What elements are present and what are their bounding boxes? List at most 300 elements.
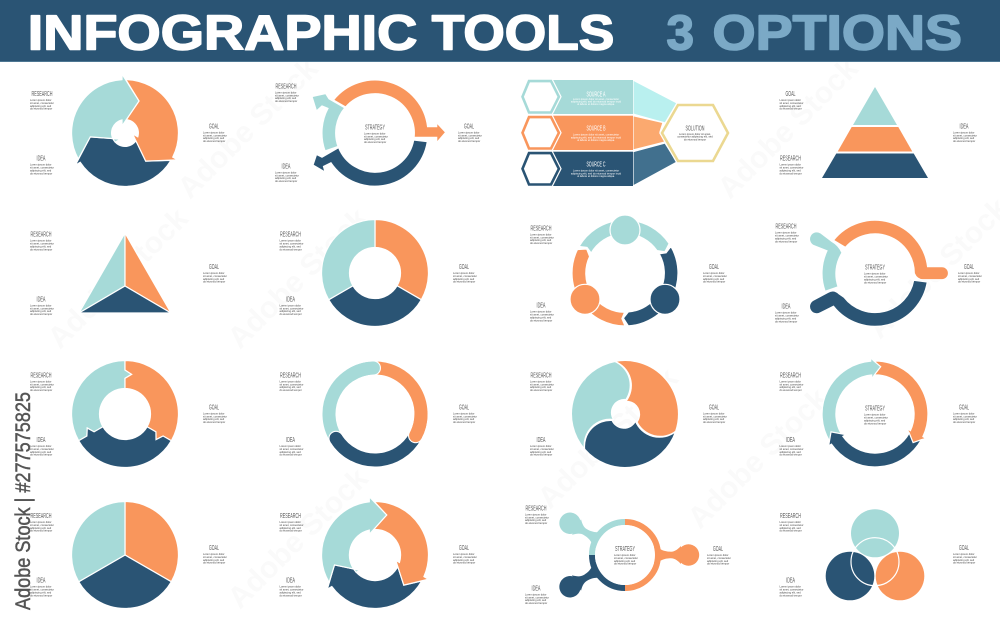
text: research: RESEARCH xyxy=(530,225,552,232)
icon: hexagon A xyxy=(522,81,559,112)
text: strategy: STRATEGY xyxy=(615,546,635,553)
panel: row 3 column 4, arrow ring xyxy=(780,354,977,488)
text: research: sit amet, consectetur xyxy=(275,93,299,97)
text: idea: adipiscing elit, sed xyxy=(530,450,552,454)
text: idea: IDEA xyxy=(536,303,546,310)
text: goal: GOAL xyxy=(209,264,219,271)
text: goal: Lorem ipsum dolor xyxy=(703,411,725,415)
text: idea: Lorem ipsum dolor xyxy=(780,444,801,448)
text: research: Lorem ipsum dolor xyxy=(30,98,52,102)
text: research: do eiusmod tempor xyxy=(275,99,297,103)
text: goal xyxy=(453,264,477,284)
chart: source bands xyxy=(552,80,633,186)
text: idea: Lorem ipsum dolor xyxy=(280,444,301,448)
text: research: adipiscing elit, sed xyxy=(30,526,52,530)
text: idea: adipiscing elit, sed xyxy=(30,168,52,172)
text: goal: sit amet, consectetur xyxy=(953,555,977,559)
text: research: do eiusmod tempor xyxy=(780,529,802,533)
text: goal: GOAL xyxy=(709,404,719,411)
text: idea: Lorem ipsum dolor xyxy=(530,444,552,448)
text: goal: Lorem ipsum dolor xyxy=(203,411,225,415)
text: idea: adipiscing elit, sed xyxy=(30,309,52,313)
text: research: do eiusmod tempor xyxy=(280,529,302,533)
text: goal: do eiusmod tempor xyxy=(453,420,475,424)
text: research xyxy=(30,372,54,392)
text: goal: sit amet, consectetur xyxy=(453,555,477,559)
text: Adobe Stock xyxy=(532,362,685,515)
text: idea: IDEA xyxy=(36,296,46,303)
text: idea xyxy=(780,437,804,457)
text: goal xyxy=(203,545,227,565)
text: idea: do eiusmod tempor xyxy=(953,139,975,143)
text: research: RESEARCH xyxy=(30,372,52,379)
text: idea: sit amet, consectetur xyxy=(280,588,304,592)
text: research: RESEARCH xyxy=(276,83,296,90)
chart: three level pyramid xyxy=(822,87,928,178)
icon: hexagon C xyxy=(522,153,559,184)
text: idea: IDEA xyxy=(36,156,46,163)
text: idea: do eiusmod tempor xyxy=(280,453,302,457)
stock id vertical label: Adobe Stock | #277575825 xyxy=(12,392,35,610)
text: research: do eiusmod tempor xyxy=(530,388,552,392)
text: idea: do eiusmod tempor xyxy=(280,593,302,597)
text: idea: adipiscing elit, sed xyxy=(953,136,975,140)
text: source B xyxy=(571,125,622,142)
text: strategy xyxy=(864,406,888,425)
panel: row 4 column 2, thick arrow cycle xyxy=(280,495,477,625)
text: research xyxy=(530,372,554,392)
text: idea: Lorem ipsum dolor xyxy=(30,163,52,167)
text: research: do eiusmod tempor xyxy=(30,529,52,533)
text: research: Lorem ipsum dolor xyxy=(280,239,301,243)
text: research: do eiusmod tempor xyxy=(30,107,52,111)
text: idea: sit amet, consectetur xyxy=(30,306,54,310)
panel: row 2 column 1, triangle xyxy=(30,232,227,316)
text: research: adipiscing elit, sed xyxy=(280,385,301,389)
text: research: sit amet, consectetur xyxy=(780,523,804,527)
text: goal: GOAL xyxy=(709,264,719,271)
panel: row 4 column 4, venn circles xyxy=(780,509,977,600)
text: goal: do eiusmod tempor xyxy=(203,420,225,424)
text: idea: do eiusmod tempor xyxy=(525,601,547,605)
text: research: Lorem ipsum dolor xyxy=(30,379,52,383)
text: goal: Lorem ipsum dolor xyxy=(203,130,225,134)
text: idea: IDEA xyxy=(286,578,295,585)
text: idea xyxy=(275,163,299,183)
text: research xyxy=(275,83,299,103)
panel: row 3 column 3, swirl circle xyxy=(530,356,727,487)
text: goal: adipiscing elit, sed xyxy=(203,136,225,140)
text: idea: Lorem ipsum dolor xyxy=(30,444,52,448)
text: goal xyxy=(703,264,727,284)
chart: three swirl lobes xyxy=(552,356,679,487)
text: research: Lorem ipsum dolor xyxy=(30,520,52,524)
text: solution: consectetur adipiscing elit, sed xyxy=(677,135,713,139)
text: idea: Lorem ipsum dolor xyxy=(275,170,297,174)
text: idea: sit amet, consectetur xyxy=(30,166,54,170)
text: goal: do eiusmod tempor xyxy=(703,280,725,284)
text: research: adipiscing elit, sed xyxy=(280,244,301,248)
text: goal: Lorem ipsum dolor xyxy=(780,98,801,102)
text: research: sit amet, consectetur xyxy=(525,515,549,519)
text: idea xyxy=(280,437,304,457)
panel: row 2 column 2, donut xyxy=(280,220,477,326)
text: research: adipiscing elit, sed xyxy=(30,385,52,389)
text: goal: Lorem ipsum dolor xyxy=(453,552,475,556)
text: idea: do eiusmod tempor xyxy=(280,312,302,316)
text: goal xyxy=(703,404,727,424)
text: research: adipiscing elit, sed xyxy=(525,518,547,522)
chart: ring with rounded segment heads xyxy=(328,360,438,477)
text: strategy: Lorem ipsum dolor xyxy=(864,413,886,417)
text: source B: SOURCE B xyxy=(586,125,606,132)
text: idea: adipiscing elit, sed xyxy=(780,450,801,454)
text: strategy: do eiusmod tempor xyxy=(864,421,886,425)
panel: row 2 column 3, ring with circles xyxy=(530,215,727,339)
text: strategy xyxy=(614,546,638,566)
text: goal: do eiusmod tempor xyxy=(707,562,729,566)
text: research: do eiusmod tempor xyxy=(780,171,802,175)
text: research: Lorem ipsum dolor xyxy=(525,512,547,516)
text: research: do eiusmod tempor xyxy=(525,521,547,525)
chart: overlapping circles xyxy=(826,509,924,600)
text: idea: adipiscing elit, sed xyxy=(275,176,297,180)
text: strategy: do eiusmod tempor xyxy=(614,562,636,566)
text: goal xyxy=(707,546,731,566)
text: goal: sit amet, consectetur xyxy=(203,133,227,137)
text: goal: GOAL xyxy=(959,404,969,411)
text: goal: do eiusmod tempor xyxy=(780,107,802,111)
text: research: Lorem ipsum dolor xyxy=(275,90,297,94)
text: research xyxy=(525,505,549,525)
text: goal xyxy=(458,123,482,143)
text: idea xyxy=(280,578,304,597)
chart: light band extensions xyxy=(633,80,677,186)
text: research: sit amet, consectetur xyxy=(30,382,54,386)
text: strategy: Lorem ipsum dolor xyxy=(614,553,636,557)
text: goal xyxy=(953,404,977,424)
text: goal: GOAL xyxy=(209,545,219,552)
text: research xyxy=(30,232,54,251)
text: strategy: sit amet, consectetur xyxy=(614,556,638,560)
panel: row 2 column 4, ring with rounded arms xyxy=(775,220,982,326)
text: goal: Lorem ipsum dolor xyxy=(707,553,729,557)
text: idea: Lorem ipsum dolor xyxy=(30,303,52,307)
text: source B: Lorem ipsum dolor sit amet, consectetur xyxy=(573,133,619,137)
text: idea: do eiusmod tempor xyxy=(30,312,52,316)
text: idea: IDEA xyxy=(36,437,46,444)
text: idea xyxy=(775,304,799,323)
text: research: sit amet, consectetur xyxy=(30,242,54,246)
text: goal xyxy=(203,264,227,284)
text: research: RESEARCH xyxy=(280,232,301,239)
text: idea xyxy=(30,156,54,175)
text: Adobe Stock xyxy=(682,382,835,535)
text: idea: do eiusmod tempor xyxy=(275,179,297,183)
text: research: RESEARCH xyxy=(530,372,552,379)
text: strategy: sit amet, consectetur xyxy=(864,275,888,279)
text: research: adipiscing elit, sed xyxy=(30,104,52,108)
text: idea: adipiscing elit, sed xyxy=(30,450,52,454)
text: goal: sit amet, consectetur xyxy=(458,133,482,137)
text: goal xyxy=(203,123,227,143)
text: goal: sit amet, consectetur xyxy=(953,414,977,418)
text: idea: Lorem ipsum dolor xyxy=(280,585,301,589)
text: Adobe Stock xyxy=(172,52,325,205)
text: idea xyxy=(780,578,804,597)
text: goal: GOAL xyxy=(713,546,723,553)
text: goal: adipiscing elit, sed xyxy=(203,277,225,281)
text: goal: GOAL xyxy=(964,264,974,271)
text: idea xyxy=(30,296,54,316)
text: idea: sit amet, consectetur xyxy=(780,447,804,451)
text: research: do eiusmod tempor xyxy=(280,247,302,251)
text: Adobe Stock xyxy=(712,52,865,205)
text: idea: sit amet, consectetur xyxy=(953,133,977,137)
text: research: Lorem ipsum dolor xyxy=(280,520,301,524)
text: idea: Lorem ipsum dolor xyxy=(280,303,301,307)
text: strategy: do eiusmod tempor xyxy=(864,280,886,284)
text: idea xyxy=(530,437,554,457)
text: goal: Lorem ipsum dolor xyxy=(953,552,975,556)
text: idea: do eiusmod tempor xyxy=(30,593,52,597)
title xyxy=(28,7,614,61)
text: research xyxy=(30,91,54,111)
text: goal: Lorem ipsum dolor xyxy=(958,271,980,275)
text: research: RESEARCH xyxy=(30,513,52,520)
text: goal: sit amet, consectetur xyxy=(453,274,477,278)
text: idea xyxy=(530,303,554,322)
text: goal: GOAL xyxy=(209,404,219,411)
text: strategy xyxy=(364,124,388,144)
text: goal: adipiscing elit, sed xyxy=(453,417,475,421)
icon: solution hexagon xyxy=(662,105,728,161)
text: idea: do eiusmod tempor xyxy=(30,453,52,457)
text: research: RESEARCH xyxy=(280,513,301,520)
text: goal: sit amet, consectetur xyxy=(703,274,727,278)
text: source C: adipiscing elit, sed do eiusmod tempor incid xyxy=(571,171,622,175)
text: idea xyxy=(525,585,549,605)
text: goal: Lorem ipsum dolor xyxy=(453,411,475,415)
text: research: sit amet, consectetur xyxy=(30,101,54,105)
text: goal: do eiusmod tempor xyxy=(453,561,475,565)
text: idea xyxy=(30,578,54,597)
title: INFOGRAPHIC xyxy=(28,7,417,61)
chart: pie in three parts xyxy=(72,502,178,608)
text: goal: adipiscing elit, sed xyxy=(703,277,725,281)
text: research xyxy=(280,372,304,392)
text: source C: Lorem ipsum dolor sit amet, consectetur xyxy=(573,169,619,173)
text: strategy: Lorem ipsum dolor xyxy=(864,272,886,276)
text: research xyxy=(780,372,804,392)
text: goal xyxy=(780,91,804,111)
panel: row 1 column 1, arrow pie cycle xyxy=(30,74,227,209)
text: idea: IDEA xyxy=(36,578,46,585)
text: Adobe Stock xyxy=(42,202,195,355)
text: goal xyxy=(953,545,977,565)
text: goal: do eiusmod tempor xyxy=(958,280,980,284)
text: goal: do eiusmod tempor xyxy=(203,561,225,565)
text: research: RESEARCH xyxy=(780,513,801,520)
text: idea: adipiscing elit, sed xyxy=(280,591,301,595)
text: research: RESEARCH xyxy=(776,224,796,231)
text: goal: GOAL xyxy=(209,123,219,130)
text: idea xyxy=(30,437,54,457)
text: research: Lorem ipsum dolor xyxy=(780,379,801,383)
text: solution: do eiusmod tempor xyxy=(684,137,706,141)
text: research: do eiusmod tempor xyxy=(780,388,802,392)
chart: donut in three parts xyxy=(322,220,428,326)
text: research: Lorem ipsum dolor xyxy=(780,163,801,167)
text: strategy: do eiusmod tempor xyxy=(364,140,386,144)
text: goal: Lorem ipsum dolor xyxy=(703,271,725,275)
text: Adobe Stock xyxy=(222,202,375,355)
text: goal: do eiusmod tempor xyxy=(703,420,725,424)
text: source B: adipiscing elit, sed do eiusmod tempor incid xyxy=(571,135,622,139)
text: idea: adipiscing elit, sed xyxy=(280,450,301,454)
text: research xyxy=(780,156,804,175)
text: idea: do eiusmod tempor xyxy=(775,319,797,323)
icon: hexagon B xyxy=(522,117,559,148)
panel: row 1 column 4, pyramid xyxy=(780,87,977,178)
text: idea: Lorem ipsum dolor xyxy=(775,311,797,315)
text: research: do eiusmod tempor xyxy=(280,388,302,392)
text: goal: GOAL xyxy=(459,545,469,552)
text: idea: do eiusmod tempor xyxy=(780,453,802,457)
panel: row 3 column 2, rounded ring xyxy=(280,360,477,477)
text: idea: sit amet, consectetur xyxy=(275,173,299,177)
text: goal: sit amet, consectetur xyxy=(707,556,731,560)
text: strategy: adipiscing elit, sed xyxy=(864,419,886,423)
text: idea: adipiscing elit, sed xyxy=(530,316,552,320)
text: idea: sit amet, consectetur xyxy=(280,447,304,451)
text: idea: adipiscing elit, sed xyxy=(280,309,301,313)
text: goal: do eiusmod tempor xyxy=(203,139,225,143)
text: goal: Lorem ipsum dolor xyxy=(203,271,225,275)
text: idea: sit amet, consectetur xyxy=(530,447,554,451)
panel: row 4 column 1, pie xyxy=(30,502,227,608)
text: idea: Lorem ipsum dolor xyxy=(30,585,52,589)
text: research xyxy=(530,225,554,245)
text: strategy: STRATEGY xyxy=(865,406,885,413)
text: research xyxy=(30,513,54,533)
text: goal: Lorem ipsum dolor xyxy=(203,552,225,556)
text: goal xyxy=(453,404,477,424)
text: source A: ut labore et dolore magna aliqua. xyxy=(577,102,615,106)
text: research: sit amet, consectetur xyxy=(530,235,554,239)
text: research: RESEARCH xyxy=(280,372,301,379)
text: goal: GOAL xyxy=(464,123,474,130)
chart: triangle in three parts xyxy=(79,233,171,313)
text: idea: IDEA xyxy=(286,437,295,444)
text: goal: sit amet, consectetur xyxy=(203,414,227,418)
text: research: do eiusmod tempor xyxy=(30,388,52,392)
text: idea xyxy=(280,296,304,316)
text: strategy: adipiscing elit, sed xyxy=(364,137,386,141)
text: idea: IDEA xyxy=(960,123,969,130)
text: source A xyxy=(571,92,622,106)
text: strategy xyxy=(864,265,888,284)
text: research: adipiscing elit, sed xyxy=(775,236,797,240)
text: research: adipiscing elit, sed xyxy=(530,385,552,389)
text: solution: Lorem ipsum dolor sit amet, xyxy=(679,132,711,136)
text: goal: adipiscing elit, sed xyxy=(707,559,729,563)
chart: ring with rounded arms xyxy=(809,220,948,326)
text: research: RESEARCH xyxy=(780,372,801,379)
chart: three interlocking arrows xyxy=(67,74,203,209)
text: goal: adipiscing elit, sed xyxy=(958,277,980,281)
text: idea xyxy=(953,123,977,143)
text: idea: do eiusmod tempor xyxy=(30,171,52,175)
text: research: RESEARCH xyxy=(32,91,52,98)
text: goal: Lorem ipsum dolor xyxy=(453,271,475,275)
text: Adobe Stock xyxy=(222,462,375,615)
text: research: adipiscing elit, sed xyxy=(280,526,301,530)
text: goal: do eiusmod tempor xyxy=(458,139,480,143)
text: source C xyxy=(571,161,622,178)
text: strategy: Lorem ipsum dolor xyxy=(364,131,386,135)
text: research: Lorem ipsum dolor xyxy=(530,232,552,236)
text: idea: IDEA xyxy=(786,437,795,444)
text: source A: SOURCE A xyxy=(586,92,606,98)
text: idea: sit amet, consectetur xyxy=(280,306,304,310)
text: research: Lorem ipsum dolor xyxy=(530,379,552,383)
text: idea: IDEA xyxy=(786,578,795,585)
text: idea: do eiusmod tempor xyxy=(780,593,802,597)
text: research: Lorem ipsum dolor xyxy=(30,239,52,243)
text: goal: sit amet, consectetur xyxy=(203,274,227,278)
text: research: sit amet, consectetur xyxy=(530,382,554,386)
text: research: do eiusmod tempor xyxy=(530,241,552,245)
text: strategy: adipiscing elit, sed xyxy=(614,559,636,563)
text: goal: sit amet, consectetur xyxy=(780,101,804,105)
text: source A: adipiscing elit, sed do eiusmod tempor incid xyxy=(571,100,622,104)
chart: ring segments with three circles xyxy=(557,215,694,339)
text: idea: sit amet, consectetur xyxy=(30,588,54,592)
text: research: Lorem ipsum dolor xyxy=(280,379,301,383)
text: research: sit amet, consectetur xyxy=(280,242,304,246)
text: research: RESEARCH xyxy=(30,232,52,239)
text: goal: adipiscing elit, sed xyxy=(453,558,475,562)
text: research: sit amet, consectetur xyxy=(780,166,804,170)
text: goal: do eiusmod tempor xyxy=(953,420,975,424)
text: idea: IDEA xyxy=(286,296,295,303)
text: research: adipiscing elit, sed xyxy=(530,238,552,242)
chart: ring of three arrows xyxy=(822,354,950,488)
text: strategy: sit amet, consectetur xyxy=(364,134,388,138)
text: goal: GOAL xyxy=(459,264,469,271)
text: goal: adipiscing elit, sed xyxy=(203,417,225,421)
text: strategy: STRATEGY xyxy=(365,124,385,131)
title: TOOLS xyxy=(432,7,614,61)
text: research: sit amet, consectetur xyxy=(30,523,54,527)
text: goal: do eiusmod tempor xyxy=(953,561,975,565)
text: idea: IDEA xyxy=(782,304,791,311)
text: goal: Lorem ipsum dolor xyxy=(953,411,975,415)
text: idea: adipiscing elit, sed xyxy=(780,591,801,595)
chart: ring with three balloon arms xyxy=(554,507,699,603)
panel: row 4 column 3, ring with balls xyxy=(525,505,731,605)
text: research: sit amet, consectetur xyxy=(280,382,304,386)
text: strategy: adipiscing elit, sed xyxy=(864,278,886,282)
text: strategy: STRATEGY xyxy=(865,265,885,272)
panel: row 1 column 2, ring with outward arrows xyxy=(275,80,482,186)
text: research: do eiusmod tempor xyxy=(30,247,52,251)
text: solution: SOLUTION xyxy=(686,125,704,132)
text: source A: Lorem ipsum dolor sit amet, consectetur xyxy=(573,97,619,101)
text: idea: do eiusmod tempor xyxy=(530,318,552,322)
text: idea: sit amet, consectetur xyxy=(530,313,554,317)
